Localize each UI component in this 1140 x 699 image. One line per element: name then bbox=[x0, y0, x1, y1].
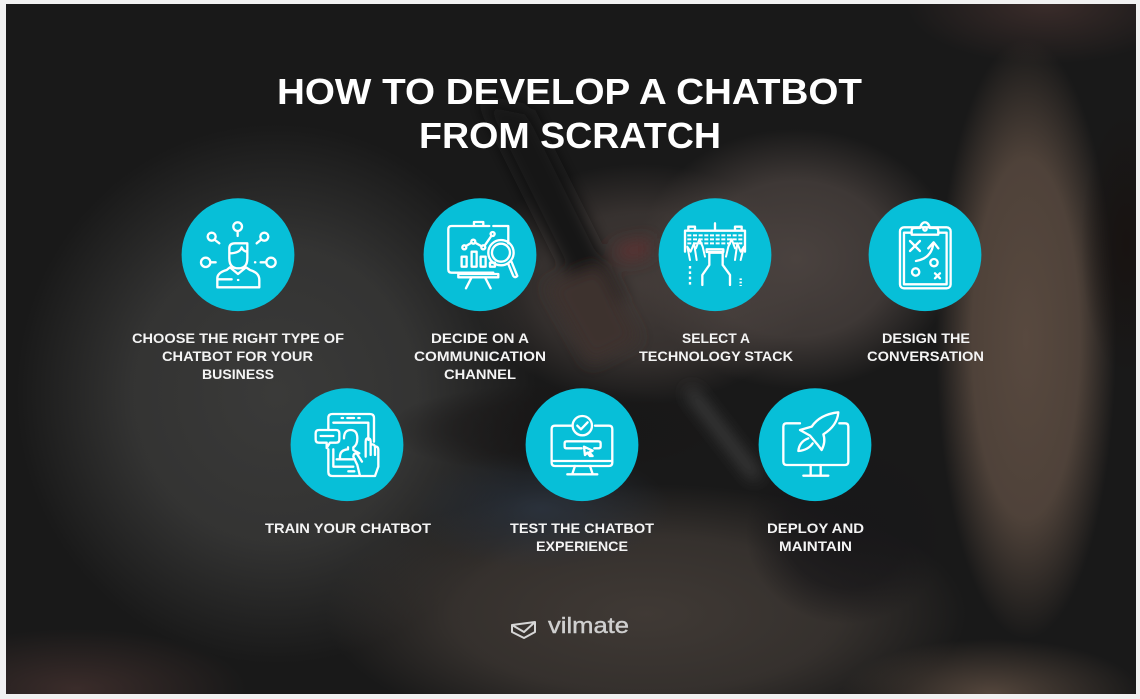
label: COMMUNICATION bbox=[414, 348, 546, 364]
label: DESIGN THE bbox=[882, 330, 970, 346]
label bbox=[510, 520, 654, 554]
label: CHANNEL bbox=[444, 366, 516, 382]
label bbox=[767, 520, 864, 554]
icon: rocket on monitor bbox=[783, 412, 848, 476]
label bbox=[132, 330, 344, 382]
label: BUSINESS bbox=[202, 366, 274, 382]
step 3: technology stack bbox=[639, 198, 793, 364]
title: HOW TO DEVELOP A CHATBOT bbox=[277, 71, 862, 112]
icon: clipboard with play strategy bbox=[900, 222, 951, 288]
label bbox=[639, 330, 793, 364]
label: TEST THE CHATBOT bbox=[510, 520, 654, 536]
phone in background bbox=[480, 100, 760, 480]
step 5: train your chatbot bbox=[265, 388, 431, 536]
step 2: communication channel bbox=[414, 198, 546, 382]
step 1: choose chatbot type bbox=[132, 198, 344, 382]
logo: vilmate bbox=[512, 613, 629, 638]
step 7: deploy and maintain bbox=[759, 388, 871, 554]
logo: vilmate: vilmate bbox=[548, 613, 629, 638]
title bbox=[277, 71, 862, 156]
icon: person with pins bbox=[201, 222, 276, 287]
label: DEPLOY AND bbox=[767, 520, 864, 536]
title: FROM SCRATCH bbox=[419, 115, 721, 156]
icon: presentation board with magnifier bbox=[448, 222, 517, 288]
step 4: design the conversation bbox=[867, 198, 984, 364]
icon: tablet with person, hand and chat bubble bbox=[316, 414, 378, 476]
label: MAINTAIN bbox=[779, 538, 852, 554]
icon: envelope mark bbox=[512, 622, 535, 638]
label: SELECT A bbox=[682, 330, 750, 346]
label: TRAIN YOUR CHATBOT bbox=[265, 520, 431, 536]
label: CHATBOT FOR YOUR bbox=[162, 348, 313, 364]
label: DECIDE ON A bbox=[431, 330, 529, 346]
label bbox=[414, 330, 546, 382]
label: CHOOSE THE RIGHT TYPE OF bbox=[132, 330, 344, 346]
icon: hands on keyboard bbox=[685, 223, 745, 286]
step 6: test the chatbot experience bbox=[510, 388, 654, 554]
label: EXPERIENCE bbox=[536, 538, 628, 554]
label: CONVERSATION bbox=[867, 348, 984, 364]
label bbox=[867, 330, 984, 364]
icon: monitor with check and cursor bbox=[552, 416, 612, 474]
label: TECHNOLOGY STACK bbox=[639, 348, 793, 364]
